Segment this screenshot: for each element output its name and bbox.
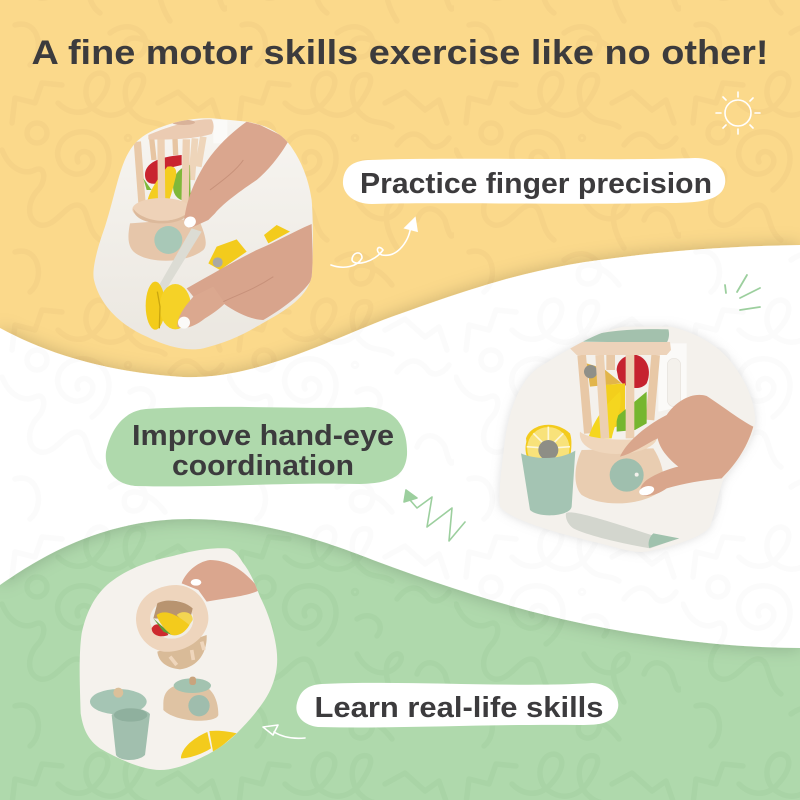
arrow: curly white — [331, 218, 417, 267]
background: yellow top area — [0, 0, 800, 450]
callout: Improve hand-eye coordination: coordination — [172, 450, 354, 482]
arrow: white curved — [263, 725, 305, 738]
photo: cutting fruit — [93, 118, 313, 349]
background: green bottom area — [0, 450, 800, 800]
callout: Improve hand-eye coordination — [106, 407, 407, 486]
callout: Learn real-life skills — [296, 683, 618, 727]
photo: blender parts — [80, 548, 277, 770]
icon: green ticks — [725, 275, 760, 310]
callout: Practice finger precision: Practice finger precision — [360, 168, 712, 200]
background: white middle wave band — [0, 245, 800, 648]
icon: sun — [716, 92, 760, 134]
arrow: green zigzag — [404, 490, 465, 541]
callout: Improve hand-eye coordination: Improve hand-eye — [132, 420, 394, 452]
title: A fine motor skills exercise like no other! — [32, 34, 768, 72]
callout: Practice finger precision — [343, 158, 725, 204]
callout: Learn real-life skills: Learn real-life skills — [314, 692, 604, 724]
photo: turning the blender knob — [500, 327, 755, 552]
